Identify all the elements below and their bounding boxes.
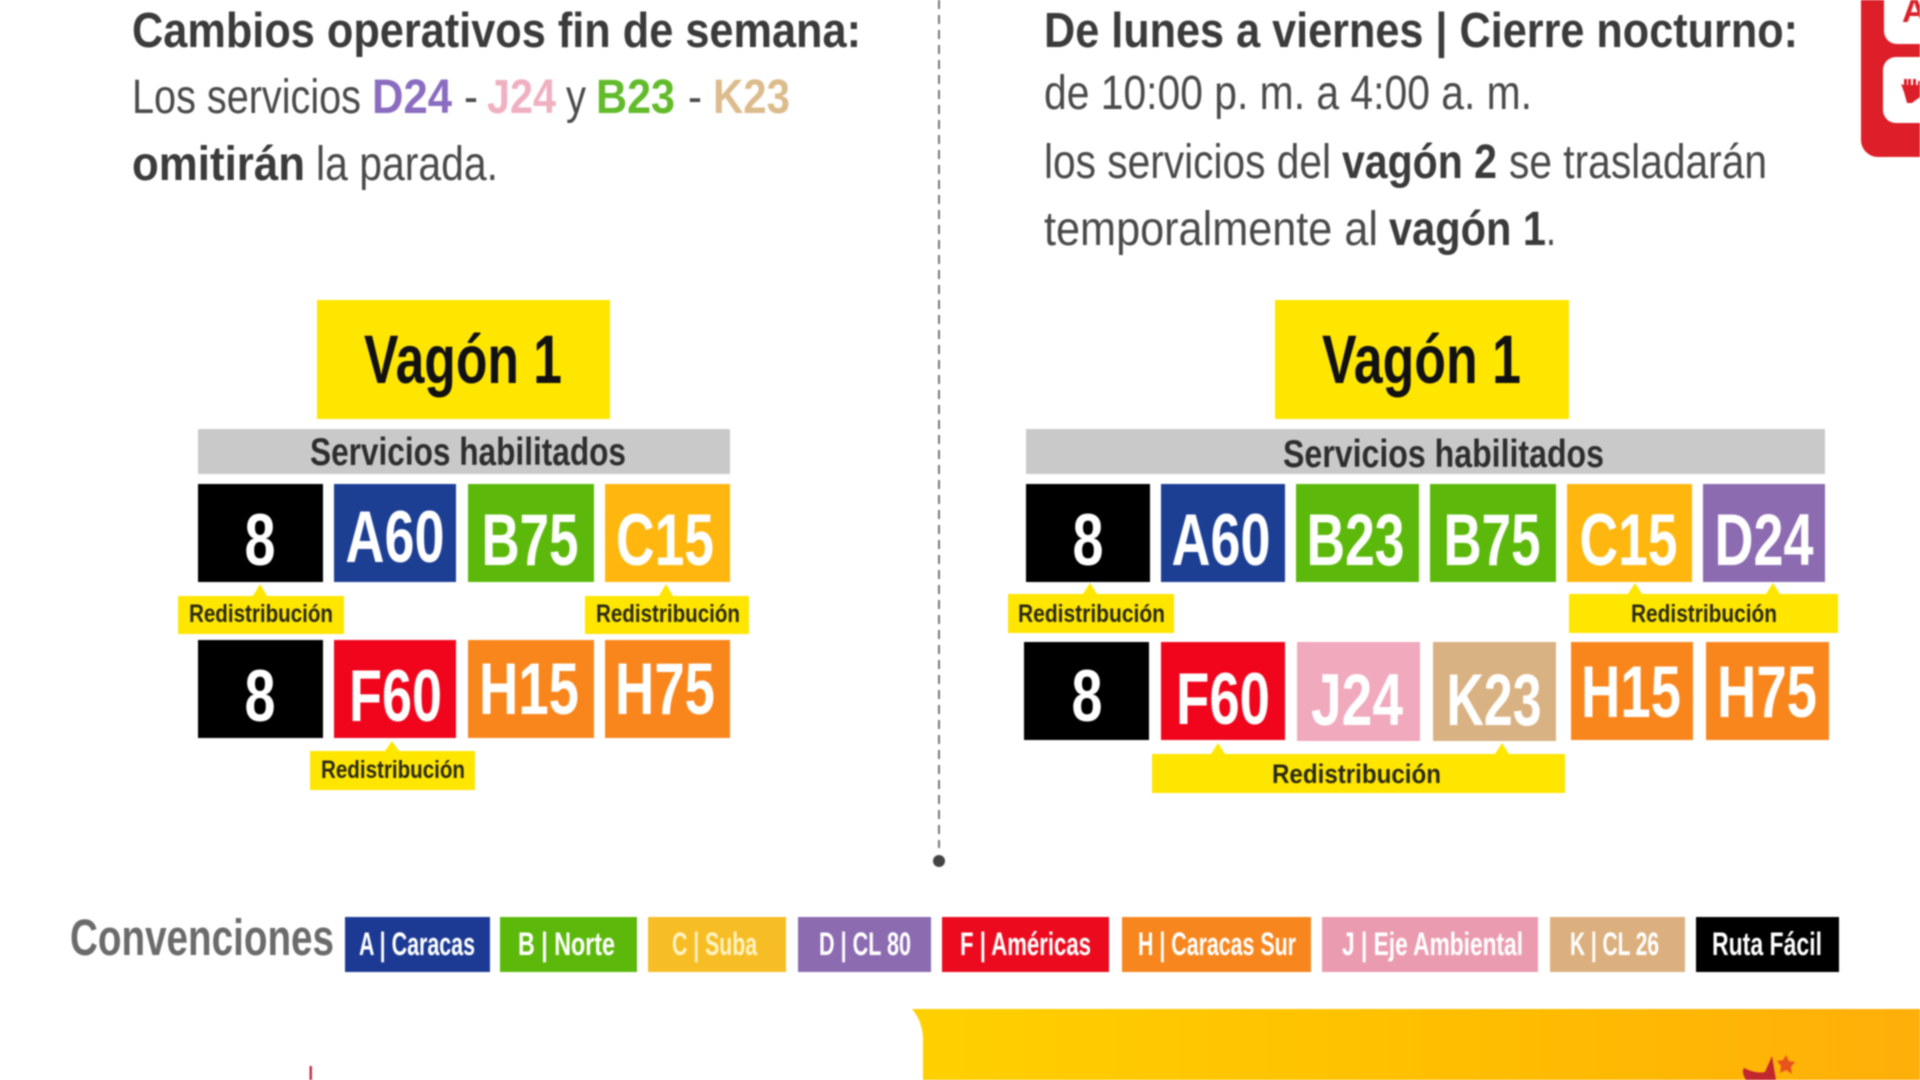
legend item: J Eje Ambiental [1322,917,1538,972]
legend item: J Eje Ambiental: J | Eje Ambiental [1342,926,1523,962]
tab button: hand icon [1883,57,1920,123]
text block: omitted services: K23 [713,71,790,124]
tile: 8: 8 [244,500,276,581]
text block: omitted services: - [688,71,702,124]
tile: C15 [605,484,730,582]
callout: redistribution 8 left: Redistribución [189,600,333,628]
tile: J24: J24 [1311,660,1403,741]
legend item: C Suba: C | Suba [672,926,757,962]
service grid: right [1024,484,1829,741]
legend item: K CL 26: K | CL 26 [1570,926,1659,962]
text block: omitted services: Los servicios [132,71,361,124]
legend: conventions [70,909,1839,972]
logo mark fragment bottom-left [310,1066,312,1080]
text block: omitted services: - [464,71,478,124]
legend item: B Norte [500,917,637,972]
panel: weekend changes [132,4,861,790]
text block: omitted services: D24 [372,71,452,124]
legend item: D CL 80: D | CL 80 [819,926,911,962]
heading: weekend changes: Cambios operativos fin de semana: [132,4,861,58]
tile: A60: A60 [1172,500,1270,581]
tile: F60: F60 [1176,659,1270,740]
tile: K23: K23 [1446,660,1542,741]
tile: F60 [1161,642,1285,740]
heading: Vagón 1 left [317,300,610,419]
tile: K23 [1433,642,1556,741]
callout: redistribution F60: Redistribución [321,756,465,784]
text block: night schedule: vagón 1 [1389,203,1546,256]
heading: Vagón 1 right: Vagón 1 [1322,321,1521,398]
callout: redistribution C15 D24: Redistribución [1631,600,1777,628]
callout: redistribution C15 D24 [1569,583,1838,633]
tile: J24 [1297,642,1420,741]
footer band: yellow [912,1009,1920,1080]
tile: A60 [334,484,456,582]
tile: B75 [468,484,594,582]
text block: omitted services: la parada. [316,138,498,191]
heading bar: enabled services right: Servicios habilitados [1283,433,1604,476]
text block: omitted services: y [566,71,586,124]
tile: B23: B23 [1306,500,1404,581]
tile: B23 [1296,484,1419,582]
tile: C15 [1567,484,1692,582]
callout: redistribution 8 right [1008,583,1174,633]
tile: 8 second row: 8 [1072,656,1102,737]
legend item: K CL 26 [1550,917,1685,972]
callout: redistribution 8 right: Redistribución [1018,600,1165,628]
tile: H15: H15 [479,649,579,730]
tile: 8: 8 [1072,500,1104,581]
tile: D24: D24 [1714,500,1814,581]
tile: D24 [1703,484,1825,582]
panel: red side tab [1861,0,1920,157]
legend item: A Caracas: A | Caracas [359,926,475,962]
text block: night schedule: los servicios del [1044,136,1331,189]
callout: redistribution C15 [585,584,749,634]
text block: night schedule: se trasladarán [1509,136,1767,189]
tile: C15: C15 [1580,500,1678,581]
tile: H75 [605,640,730,738]
legend item: D CL 80 [798,917,931,972]
tile: B75: B75 [1444,500,1540,581]
legend item: H Caracas Sur: H | Caracas Sur [1138,926,1296,962]
tile: H75 [1706,642,1829,740]
text block: night schedule: . [1546,203,1556,256]
callout: redistribution C15: Redistribución [596,600,740,628]
service grid: left [198,484,730,738]
legend item: F Américas: F | Américas [960,926,1091,962]
legend item: A Caracas [345,917,490,972]
text block: night schedule: vagón 2 [1342,136,1497,189]
callout: redistribution 8 left [178,584,344,634]
tile: H75: H75 [615,649,715,730]
callout: redistribution F60 J24 K23: Redistribución [1272,759,1441,789]
legend item: Ruta Fácil [1696,917,1839,972]
tile: F60: F60 [349,656,442,737]
tile: A60 [1161,484,1285,582]
text block: omitted services: omitirán [132,138,305,191]
heading: Vagón 1 right [1275,300,1569,419]
callout: redistribution F60 J24 K23 [1152,743,1565,793]
callout: redistribution F60 [310,741,475,790]
tile: B75: B75 [482,500,578,581]
tile: C15: C15 [616,500,714,581]
heading bar: enabled services right [1026,429,1825,476]
tile: 8 second row [1024,642,1149,740]
panel: weekday night closure [1008,4,1838,793]
tile: H15 [468,640,594,738]
text block: night schedule [1044,67,1767,256]
heading: weekday closure: De lunes a viernes | Cierre nocturno: [1044,4,1798,58]
text block: omitted services: B23 [596,71,675,124]
center divider [933,0,945,867]
legend item: C Suba [648,917,786,972]
legend item: B Norte: B | Norte [518,926,615,962]
icon: star logo [1743,1055,1795,1080]
tile: 8 [1026,484,1150,582]
tile: F60 [334,640,456,738]
tile: B75 [1430,484,1556,582]
legend title: Convenciones [70,909,334,966]
tile: H15 [1571,642,1693,740]
legend item: F Américas [942,917,1109,972]
text block: night schedule: temporalmente al [1044,203,1378,256]
heading: Vagón 1 left: Vagón 1 [364,321,562,398]
legend item: Ruta Fácil: Ruta Fácil [1712,926,1822,962]
tile: 8 [198,484,323,582]
text block: omitted services: J24 [487,71,556,124]
tile: H15: H15 [1581,652,1681,733]
tile: A60: A60 [346,497,444,578]
tile: 8 second row [198,640,323,738]
tile: 8 second row: 8 [244,656,276,737]
legend item: H Caracas Sur [1122,917,1311,972]
heading bar: enabled services left: Servicios habilitados [310,431,626,474]
text block: night schedule: de 10:00 p. m. a 4:00 a. m. [1044,67,1532,120]
tab button: accessibility top [1884,0,1920,44]
tile: H75: H75 [1717,652,1817,733]
text block: omitted services [132,71,790,191]
